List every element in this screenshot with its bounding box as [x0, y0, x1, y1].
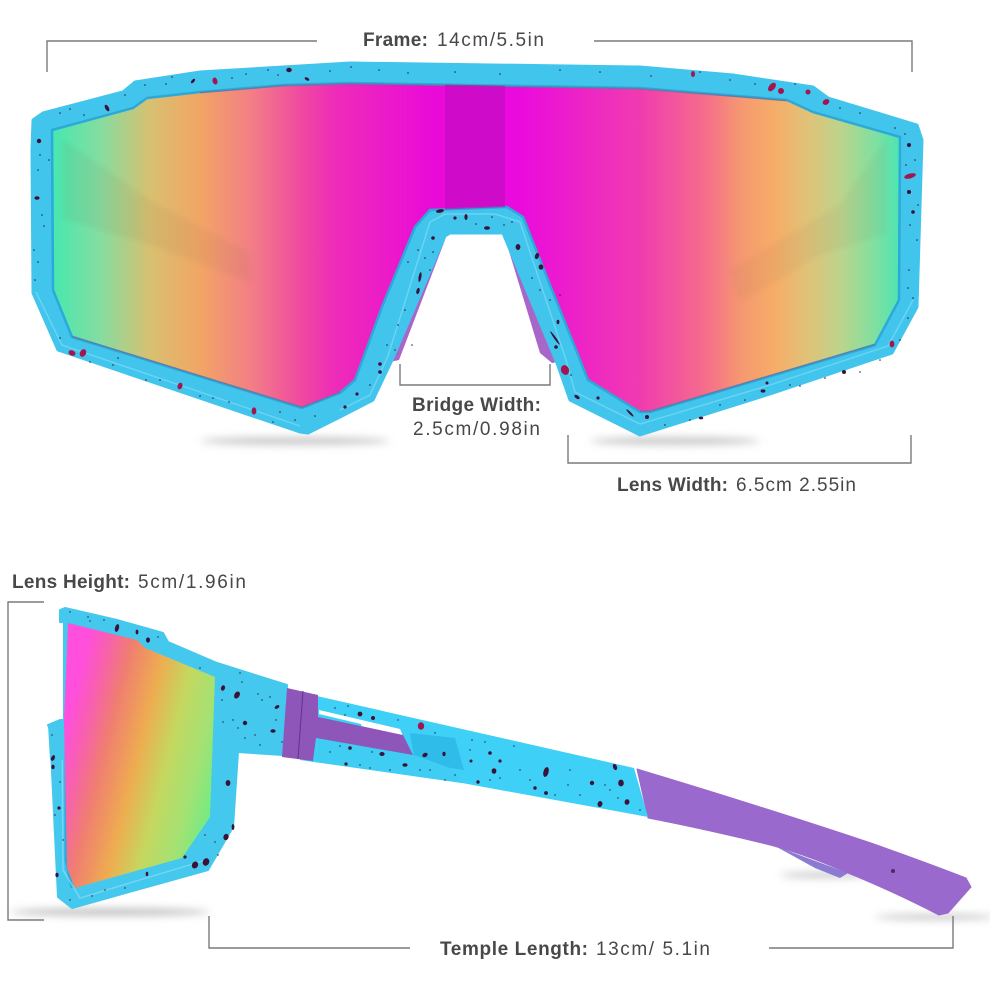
lens edge tint [72, 83, 875, 412]
purple hinge [282, 688, 413, 761]
temple window [410, 733, 464, 770]
ground shadows [10, 437, 990, 920]
dimension: lens height: Lens Height: [12, 572, 130, 593]
front frame [32, 63, 922, 435]
small side speckles [52, 612, 640, 900]
front frame speckles [34, 68, 916, 419]
dimension: bridge width [400, 364, 550, 440]
dimension: temple length [209, 916, 953, 960]
temple arm [300, 694, 648, 817]
small front speckles [34, 67, 918, 425]
mirrored lens [52, 80, 900, 412]
white slot [319, 710, 403, 736]
side frame [48, 608, 287, 908]
side view sunglasses [48, 608, 971, 915]
dimension: bridge width: 2.5cm/0.98in [413, 419, 540, 440]
centre bridge band [445, 80, 505, 210]
left temple reflection [64, 144, 248, 277]
dimension: lens height: 5cm/1.96in [138, 572, 246, 593]
right temple reflection [860, 151, 884, 238]
blue sliver in slot [319, 714, 362, 728]
dimension: lens width: 6.5cm 2.55in [736, 475, 856, 496]
temple arm rubber tip [637, 769, 971, 915]
dimension: temple length: 13cm/ 5.1in [596, 939, 710, 960]
dimension: frame width: Frame: [363, 30, 428, 51]
side lens [64, 623, 215, 888]
purple nose pads [390, 236, 558, 363]
dimension: frame width: 14cm/5.5in [437, 30, 544, 51]
dimension: lens width [568, 435, 911, 496]
dimension: frame width [47, 30, 912, 72]
dimension: bridge width: Bridge Width: [412, 395, 541, 416]
dimension: lens height [8, 572, 246, 920]
dimension: lens width: Lens Width: [617, 475, 728, 496]
side frame speckles [50, 624, 630, 877]
dimension: temple length: Temple Length: [440, 939, 588, 960]
frame highlight [36, 214, 913, 426]
front view sunglasses [32, 63, 922, 435]
